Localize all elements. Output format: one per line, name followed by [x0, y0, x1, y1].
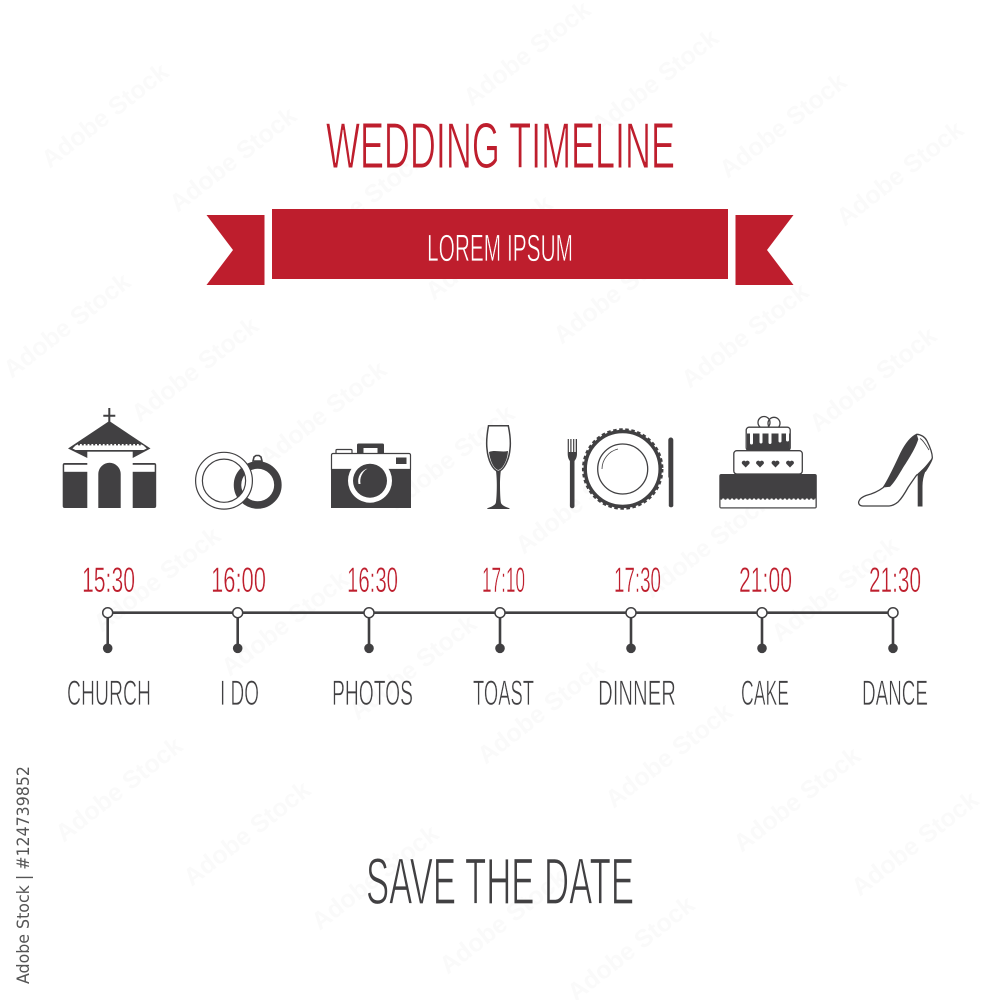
text: Adobe Stock	[676, 278, 814, 394]
label: i do: I DO	[220, 674, 259, 713]
wedding band	[199, 456, 249, 506]
time: cake: 21:00	[739, 561, 792, 600]
label: photos: PHOTOS	[332, 674, 413, 713]
text: Adobe Stock	[586, 24, 724, 140]
plate	[585, 432, 660, 506]
text: Adobe Stock	[728, 742, 866, 858]
stock credit: Adobe Stock | #124739852	[14, 766, 34, 984]
time: church: 15:30	[82, 561, 135, 600]
text: Adobe Stock	[548, 234, 686, 350]
icon: high heel shoe	[859, 434, 932, 506]
text: Adobe Stock	[510, 444, 648, 560]
time: dance: 21:30	[869, 561, 921, 600]
icon: church	[63, 408, 156, 508]
engagement ring	[238, 465, 278, 505]
times row	[82, 561, 921, 600]
knife	[668, 438, 673, 507]
text: Adobe Stock	[178, 776, 316, 892]
ribbon right tail	[736, 215, 794, 285]
label: toast: TOAST	[473, 674, 534, 713]
text: Adobe Stock	[50, 732, 188, 848]
text: Adobe Stock	[472, 654, 610, 770]
text: Adobe Stock	[344, 610, 482, 726]
ribbon centre band	[272, 209, 728, 279]
text: Adobe Stock	[382, 400, 520, 516]
label: dinner: DINNER	[598, 674, 676, 713]
text: Adobe Stock	[254, 356, 392, 472]
text: Adobe Stock	[216, 566, 354, 682]
text: Adobe Stock	[766, 532, 904, 648]
label: church: CHURCH	[67, 674, 151, 713]
text: Adobe Stock	[434, 864, 572, 980]
text: Adobe Stock	[638, 488, 776, 604]
icon: wedding rings	[199, 456, 278, 506]
ribbon text: LOREM IPSUM	[427, 228, 573, 270]
times row: 17:10	[482, 561, 525, 600]
icon: camera	[331, 444, 411, 508]
icon: wedding cake	[719, 416, 817, 508]
text: Adobe Stock	[714, 68, 852, 184]
time: photos: 16:30	[347, 561, 398, 600]
time: dinner: 17:30	[614, 561, 661, 600]
icon: plate with fork and knife	[568, 430, 673, 508]
ribbon banner	[206, 209, 794, 285]
text: Adobe Stock	[164, 102, 302, 218]
text: Adobe Stock	[804, 322, 942, 438]
fork	[568, 439, 577, 508]
text: Adobe Stock	[420, 190, 558, 306]
label: dance: DANCE	[862, 674, 928, 713]
label: cake: CAKE	[741, 674, 789, 713]
timeline	[103, 608, 898, 653]
text: Adobe Stock	[88, 522, 226, 638]
save the date: SAVE THE DATE	[366, 844, 634, 918]
text: Adobe Stock	[831, 116, 969, 232]
text: Adobe Stock	[292, 146, 430, 262]
text: Adobe Stock	[0, 268, 136, 384]
time: i do: 16:00	[211, 561, 266, 600]
text: Adobe Stock	[600, 698, 738, 814]
text: Adobe Stock	[126, 312, 264, 428]
text: Adobe Stock	[846, 786, 984, 902]
ribbon left tail	[206, 215, 264, 285]
event labels	[67, 674, 928, 713]
icon: champagne glass	[487, 426, 510, 509]
text: Adobe Stock	[36, 58, 174, 174]
text: Adobe Stock	[306, 820, 444, 936]
title: WEDDING TIMELINE	[326, 109, 675, 182]
